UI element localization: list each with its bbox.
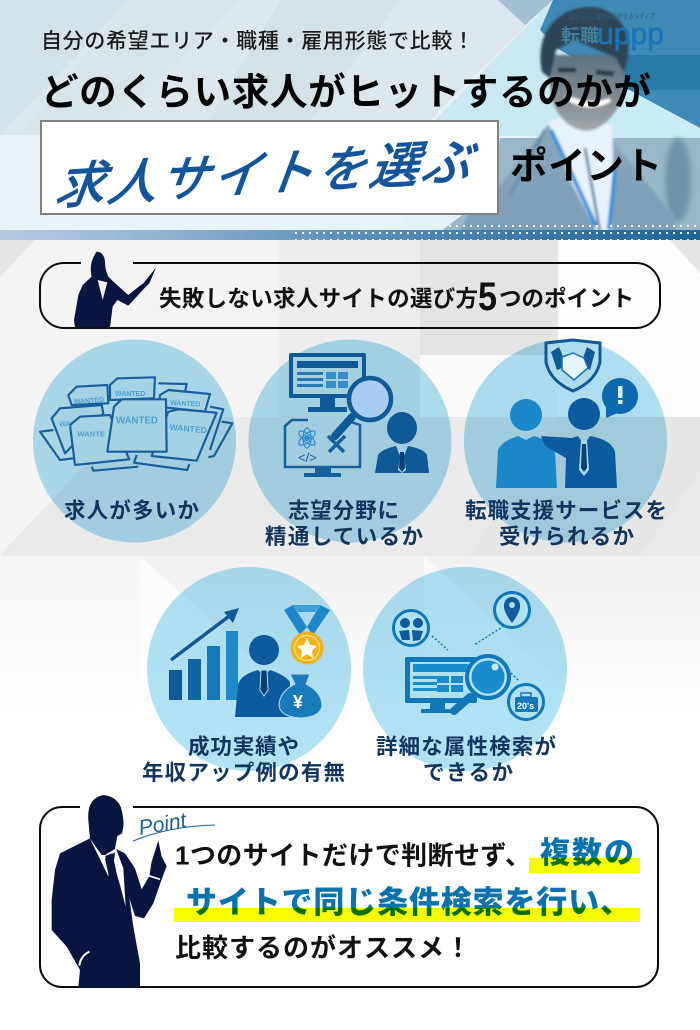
- point 5: attribute search: できるか: [423, 761, 513, 785]
- icon: 20's case badge: 20's: [517, 701, 534, 711]
- icon: businessman silhouette pointing up: [52, 795, 167, 987]
- icon: money bag: [279, 674, 322, 718]
- logo: 転職: [561, 26, 599, 46]
- highlighted title box: 求人サイトを選ぶ: [50, 133, 486, 215]
- label: 志望分野に: [288, 499, 399, 523]
- icon: money bag: ¥: [293, 692, 303, 712]
- label: 詳細な属性検索が: [376, 734, 556, 759]
- header banner background: [0, 0, 700, 232]
- icon: monitor and magnifier: [285, 353, 429, 477]
- icon: woman pointing silhouette: [74, 252, 156, 327]
- icon: wanted papers: WANTED: [169, 422, 207, 435]
- icon: wanted papers: WA: [59, 422, 71, 429]
- label: 求人が多いか: [64, 498, 199, 523]
- point 4: success record: [142, 567, 351, 785]
- logo: 自分らしい働き方を叶えるメディア: [569, 11, 655, 21]
- icon: wanted papers: WANTED: [170, 400, 200, 409]
- header lead text: 自分の希望エリア・職種・雇用形態で比較！: [41, 30, 474, 53]
- point 3: career support: [464, 340, 667, 549]
- icon: businessman: [235, 635, 290, 717]
- icon: search monitor: [405, 656, 509, 713]
- page background facets: [0, 232, 700, 1030]
- point handwritten label: [133, 809, 215, 841]
- conclusion text: サイトで同じ条件検索を行い、: [186, 885, 631, 920]
- icon: rising bar chart: [169, 608, 239, 700]
- icon: location badge: [494, 592, 530, 628]
- point 4: success record: 年収アップ例の有無: [142, 761, 345, 785]
- conclusion text: 比較するのがオススメ！: [175, 933, 471, 963]
- icon: wanted papers: WANTED: [74, 397, 104, 406]
- highlight bars: [174, 858, 640, 922]
- icon: 20's case badge: [508, 684, 544, 720]
- icon: wanted papers: WANTE: [77, 430, 105, 439]
- point 2: expertise: [248, 340, 452, 549]
- conclusion text: 1つのサイトだけで判断せず、: [175, 840, 531, 870]
- icon: two people with speech bubble: [496, 378, 638, 488]
- point 1: many listings: [33, 340, 236, 542]
- icon: gold medal: [284, 605, 330, 664]
- photo: businessman: [459, 7, 676, 232]
- icon: monitor and magnifier: </>: [298, 450, 317, 465]
- point 3: career support: 受けられるか: [499, 525, 634, 549]
- icon: shield handshake: [546, 340, 600, 391]
- heading suffix: ポイント: [510, 145, 662, 187]
- conclusion text: 複数の: [540, 837, 634, 870]
- header gradient strip: [0, 224, 700, 240]
- section title text: [159, 275, 634, 319]
- icon: people badge: [394, 610, 428, 646]
- section title pill: [40, 252, 660, 328]
- conclusion text: [175, 837, 634, 963]
- label: 成功実績や: [188, 735, 299, 759]
- icon: wanted papers: [40, 377, 232, 471]
- logo: [561, 11, 664, 51]
- point 5: attribute search: [363, 567, 567, 785]
- icon: wanted papers: WANTED: [115, 391, 145, 398]
- icon: wanted papers: WANTED: [116, 415, 158, 426]
- section title text: 失敗しない求人サイトの選び方: [159, 286, 478, 312]
- point 2: expertise: 精通しているか: [265, 525, 423, 549]
- label: 転職支援サービスを: [465, 499, 667, 523]
- main heading: どのくらい求人がヒットするのかが: [41, 71, 651, 113]
- point handwritten label: Point: [137, 809, 189, 840]
- section title text: 5: [478, 275, 497, 319]
- conclusion panel: [40, 795, 658, 987]
- logo: uppp: [597, 16, 664, 51]
- section title text: つのポイント: [499, 286, 634, 312]
